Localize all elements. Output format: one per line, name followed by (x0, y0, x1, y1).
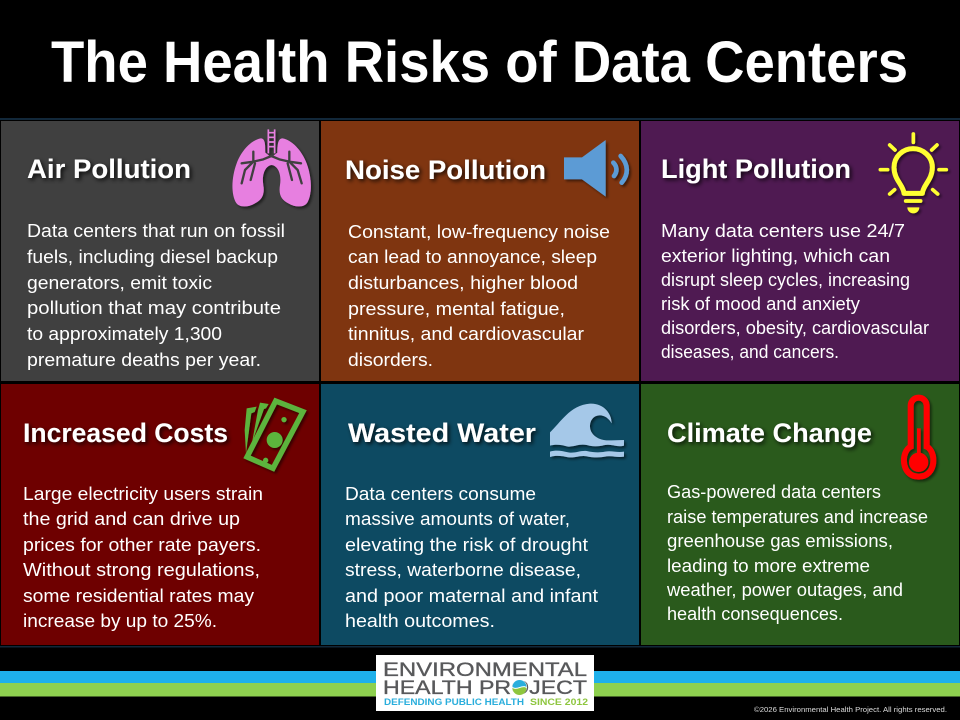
body text: climate change: weather, power outages, and (666, 580, 903, 600)
icon: money (245, 401, 303, 468)
body text: increased costs: the grid and can drive up (23, 509, 240, 529)
body text: air pollution: pollution that may contribute (27, 298, 281, 318)
body text: noise pollution (348, 222, 610, 370)
body text: noise pollution: can lead to annoyance, sleep (348, 247, 597, 267)
body text: air pollution: Data centers that run on fossil (27, 221, 285, 241)
copyright: ©2026 Environmental Health Project. All rights reserved. (754, 705, 947, 714)
body text: increased costs: increase by up to 25%. (23, 611, 217, 631)
logo: Environmental Health Project: ENVIRONMENTAL (383, 659, 587, 681)
body text: noise pollution: tinnitus, and cardiovascular (348, 324, 584, 344)
body text: air pollution: fuels, including diesel backup (27, 247, 278, 267)
title: The Health Risks of Data Centers (51, 30, 908, 95)
heading: light pollution: Light Pollution (661, 154, 851, 184)
body text: increased costs: Without strong regulations, (23, 560, 260, 580)
heading: air pollution: Air Pollution (27, 154, 191, 184)
icon: wave (550, 404, 624, 458)
panel: climate change (641, 384, 959, 645)
heading: increased costs: Increased Costs (23, 418, 228, 448)
body text: light pollution: disrupt sleep cycles, increasing (661, 270, 910, 290)
body text: increased costs: Large electricity users strain (23, 484, 263, 504)
footer stripes (0, 671, 960, 696)
body text: noise pollution: disturbances, higher blood (348, 273, 578, 293)
body text: noise pollution: pressure, mental fatigue, (348, 299, 565, 319)
body text: noise pollution: Constant, low-frequency noise (348, 222, 610, 242)
logo: Environmental Health Project: HEALTH PROJECT (383, 677, 587, 699)
body text: climate change (666, 482, 928, 624)
body text: light pollution: risk of mood and anxiety (661, 294, 860, 314)
body text: wasted water: and poor maternal and infant (345, 586, 598, 606)
body text: increased costs (23, 484, 263, 631)
body text: light pollution (661, 221, 929, 362)
body text: air pollution: to approximately 1,300 (27, 324, 222, 344)
body text: noise pollution: disorders. (348, 350, 433, 370)
heading: climate change: Climate Change (667, 418, 872, 448)
heading: noise pollution: Noise Pollution (345, 155, 546, 185)
logo: Environmental Health Project: DEFENDING PUBLIC HEALTH (384, 697, 524, 708)
body text: climate change: greenhouse gas emissions, (667, 531, 893, 551)
body text: wasted water: health outcomes. (345, 611, 495, 631)
logo: Environmental Health Project: SINCE 2012 (530, 697, 588, 708)
body text: climate change: Gas-powered data centers (667, 482, 881, 502)
body text: light pollution: exterior lighting, which can (661, 246, 890, 266)
body text: wasted water (345, 484, 598, 631)
body text: wasted water: massive amounts of water, (345, 509, 570, 529)
icon: thermometer (904, 398, 933, 477)
icon: lungs (232, 129, 311, 206)
body text: wasted water: Data centers consume (345, 484, 536, 504)
panel: increased costs (1, 384, 319, 645)
icon: light bulb (880, 134, 946, 213)
body text: climate change: leading to more extreme (667, 556, 870, 576)
panel: air pollution (1, 121, 319, 381)
body text: light pollution: disorders, obesity, cardiovascular (661, 318, 929, 338)
body text: climate change: health consequences. (667, 604, 843, 624)
panel: wasted water (321, 384, 639, 645)
body text: light pollution: diseases, and cancers. (661, 342, 839, 362)
heading: wasted water: Wasted Water (348, 418, 537, 448)
body text: increased costs: prices for other rate payers. (23, 535, 261, 555)
icon: speaker (564, 140, 627, 197)
body text: increased costs: some residential rates may (23, 586, 254, 606)
body text: light pollution: Many data centers use 24/7 (661, 221, 905, 241)
body text: air pollution (27, 221, 285, 370)
body text: air pollution: premature deaths per year. (27, 350, 261, 370)
body text: wasted water: elevating the risk of drought (345, 535, 588, 555)
body text: air pollution: generators, emit toxic (27, 273, 212, 293)
panel: light pollution (641, 121, 959, 381)
panel: noise pollution (321, 121, 639, 381)
logo: Environmental Health Project (376, 655, 594, 711)
body text: climate change: raise temperatures and increase (667, 507, 928, 527)
body text: wasted water: stress, waterborne disease, (345, 560, 581, 580)
